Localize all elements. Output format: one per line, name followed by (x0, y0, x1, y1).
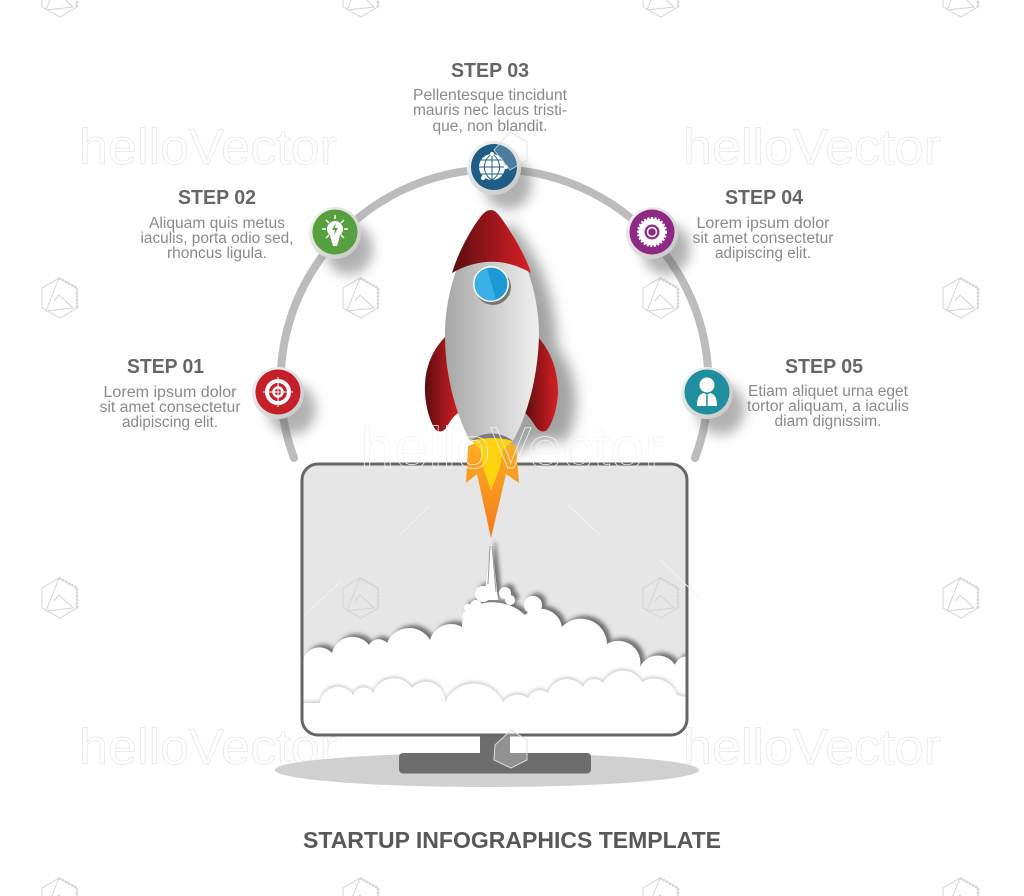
watermark pattern: helloVector (79, 719, 337, 775)
step 04 text: adipiscing elit. (715, 245, 811, 262)
step 05 text: diam dignissim. (774, 413, 882, 430)
monitor screen (302, 464, 687, 735)
step 03 text: mauris nec lacus tristi- (413, 102, 567, 119)
center watermark: helloVector (360, 416, 665, 481)
step 03 text: que, non blandit. (432, 118, 548, 135)
step 03 text: Pellentesque tincidunt (413, 87, 568, 104)
icon: gear (638, 218, 666, 246)
step 04 node (626, 207, 690, 275)
icon: light bulb (322, 215, 348, 246)
monitor bezel (302, 464, 687, 735)
monitor neck (480, 734, 510, 754)
title: STARTUP INFOGRAPHICS TEMPLATE (303, 827, 721, 853)
step 04 text (692, 187, 834, 262)
step 04 text: STEP 04 (725, 187, 804, 209)
rocket flame (466, 438, 519, 538)
step 01 text (100, 356, 240, 431)
step 04 text: Lorem ipsum dolor (696, 215, 830, 232)
rocket body (445, 210, 539, 441)
step 03 text (413, 60, 568, 135)
left fin (425, 336, 460, 431)
step 02 text: STEP 02 (178, 187, 256, 209)
step 05 text: Etiam aliquet urna eget (748, 383, 909, 400)
rocket nose (452, 210, 531, 273)
step 01 text: STEP 01 (127, 356, 204, 378)
engine nozzle (470, 434, 513, 441)
smoke clouds (304, 540, 686, 734)
step 05 node (681, 367, 745, 435)
step 05 text: tortor aliquam, a iaculis (747, 398, 909, 415)
monitor floor shadow (275, 753, 699, 787)
watermark pattern: helloVector (79, 119, 337, 175)
step 05 text: STEP 05 (785, 356, 863, 378)
watermark pattern: helloVector (683, 719, 941, 775)
step 01 text: Lorem ipsum dolor (104, 384, 236, 401)
exhaust trail (488, 546, 496, 592)
step 03 node (467, 132, 532, 210)
step 01 text: sit amet consectetur (100, 399, 240, 416)
step 01 node (252, 367, 316, 435)
screen watermark marks (305, 505, 700, 768)
step 02 text (140, 187, 294, 262)
watermark pattern: helloVector (683, 119, 941, 175)
step 02 text: rhoncus ligula. (167, 245, 267, 262)
step 03 text: STEP 03 (451, 60, 529, 82)
arc connecting the steps (281, 169, 708, 458)
rocket (425, 210, 576, 538)
step 02 text: iaculis, porta odio sed, (140, 230, 294, 247)
rocket shadow (463, 222, 576, 452)
icon: businessperson (697, 378, 717, 406)
step 02 node (309, 207, 373, 275)
step 01 text: adipiscing elit. (122, 414, 218, 431)
step 05 text (747, 356, 909, 430)
step 04 text: sit amet consectetur (692, 230, 834, 247)
icon: globe (479, 132, 527, 180)
rocket window (473, 266, 511, 305)
monitor base (399, 753, 591, 774)
icon: target (263, 377, 293, 407)
monitor (275, 464, 710, 787)
right fin (524, 336, 558, 431)
step 02 text: Aliquam quis metus (149, 215, 285, 232)
